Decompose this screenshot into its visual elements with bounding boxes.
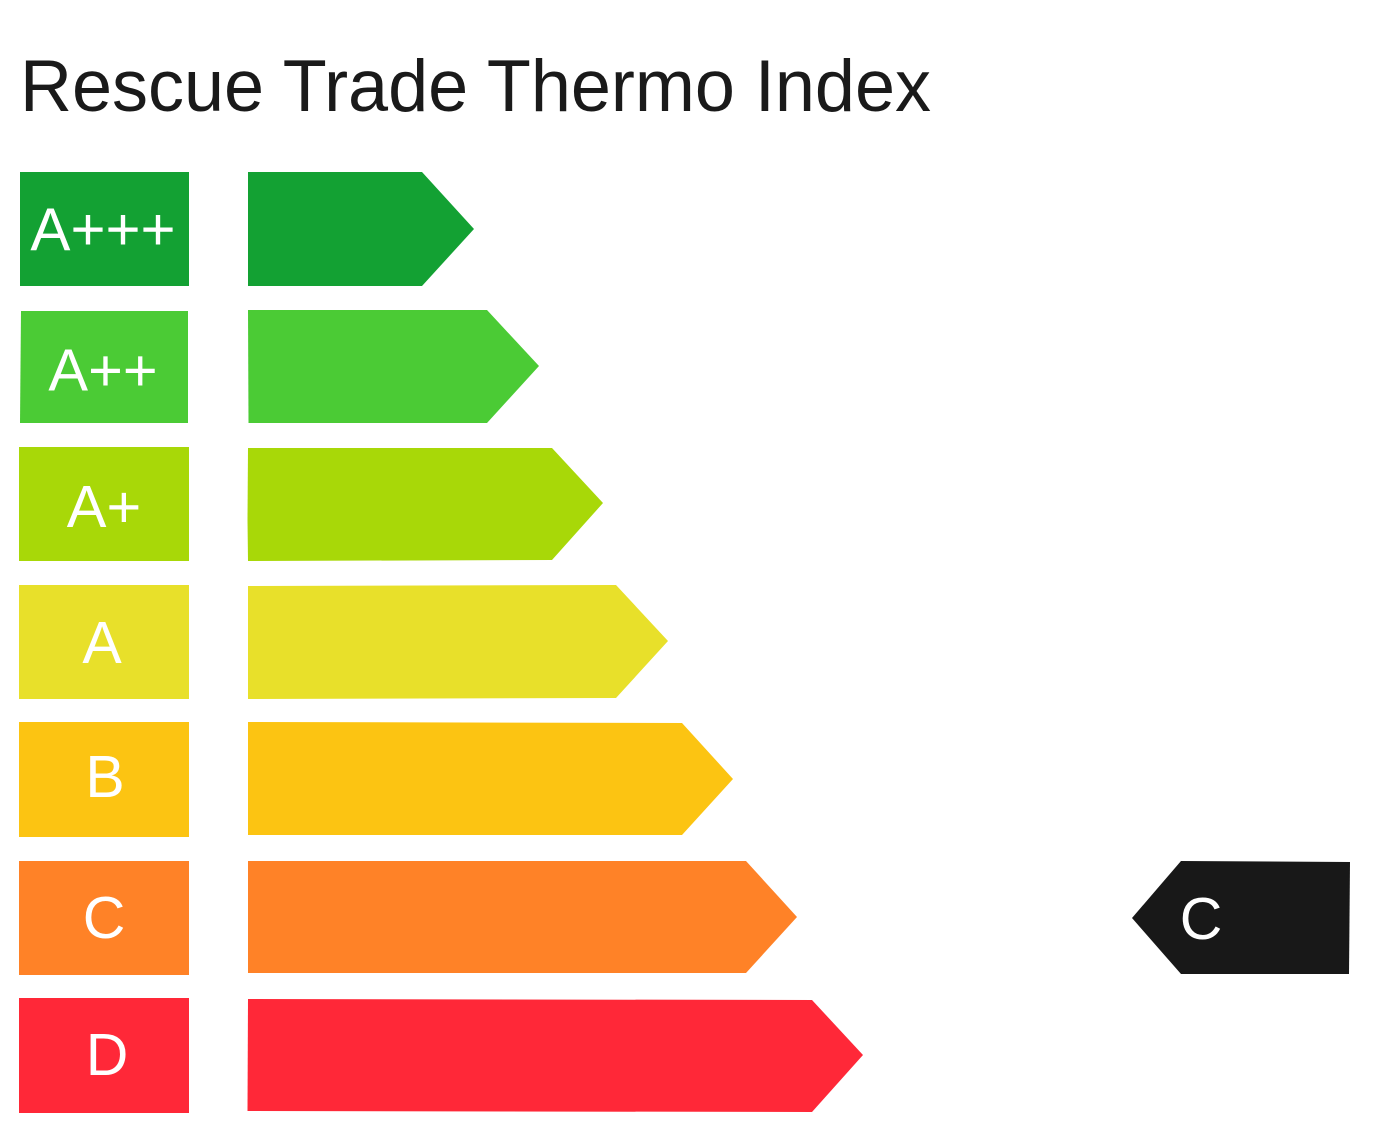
current rating marker: C: C [1180,886,1222,952]
rating row: B: B [85,744,125,810]
rating row: D [19,998,863,1113]
rating row: A+++ [20,172,474,286]
rating row: C [19,861,797,975]
rating row: A++ [20,310,539,423]
rating row: A+ [19,447,603,561]
rating row: A: A [82,610,122,676]
rating row: B [19,722,733,837]
rating row: A++: A++ [48,336,158,404]
rating row: A+++: A+++ [30,196,176,263]
rating row: C: C [83,885,125,951]
rating row: A+: A+ [67,473,141,540]
rating row: A [19,585,668,699]
rating row: D: D [86,1022,128,1088]
title: Rescue Trade Thermo Index [20,46,931,127]
current rating marker: C [1132,861,1350,974]
